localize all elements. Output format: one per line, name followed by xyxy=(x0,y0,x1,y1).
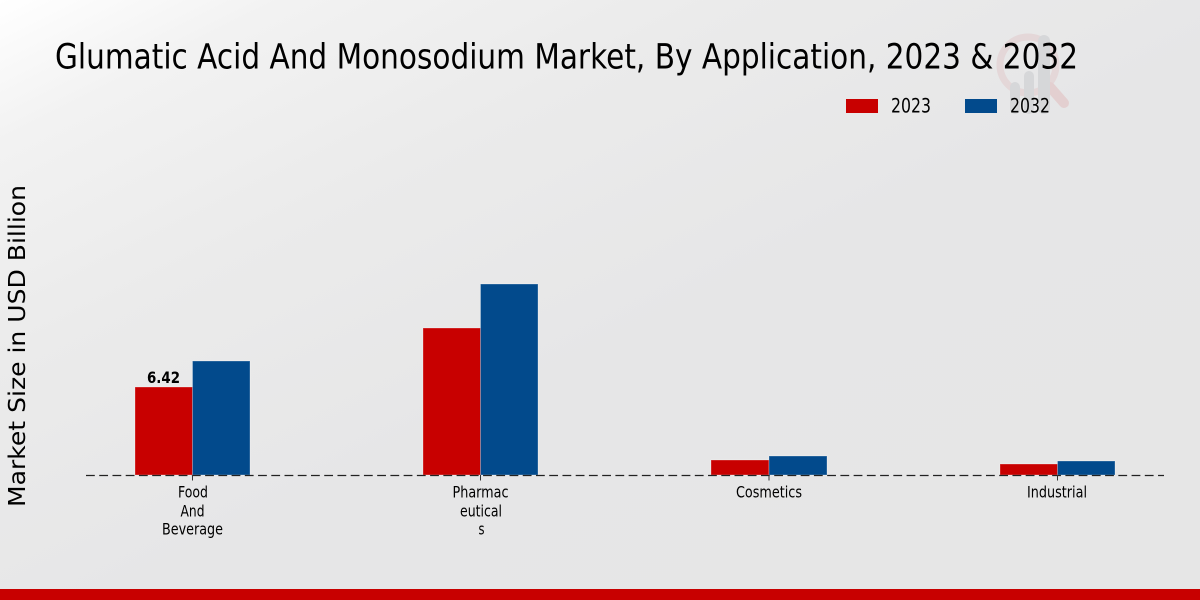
category label: Pharmaceuticals: Pharmac xyxy=(452,482,508,502)
bars: Food And Beverage xyxy=(135,361,250,475)
legend item: 2023 xyxy=(846,94,931,118)
bars: Industrial xyxy=(1000,461,1115,475)
legend item: 2032 xyxy=(965,94,1050,118)
bars: Pharmaceuticals xyxy=(423,284,538,475)
category label: Pharmaceuticals: s xyxy=(478,520,484,538)
footer band xyxy=(0,589,1200,600)
category label: Food And Beverage: Food xyxy=(178,482,208,502)
bar chart xyxy=(86,284,1164,538)
category label: Food And Beverage: Beverage xyxy=(162,520,223,538)
category label: Food And Beverage xyxy=(162,482,223,538)
category label: Pharmaceuticals xyxy=(452,482,508,538)
category label: Food And Beverage: And xyxy=(180,502,204,520)
legend item: 2023: 2023 xyxy=(891,94,931,118)
value label: 6.42: 6.42 xyxy=(147,368,180,387)
watermark logo xyxy=(1000,35,1064,114)
x axis baseline xyxy=(86,474,1164,476)
legend item: 2032: 2032 xyxy=(1010,94,1050,118)
category label: Cosmetics: Cosmetics xyxy=(736,482,802,502)
category label: Industrial: Industrial xyxy=(1027,482,1087,502)
legend xyxy=(846,94,1050,118)
bars: Cosmetics xyxy=(711,456,827,475)
y-axis label: Market Size in USD Billion xyxy=(5,185,31,507)
category label: Pharmaceuticals: eutical xyxy=(460,502,502,520)
